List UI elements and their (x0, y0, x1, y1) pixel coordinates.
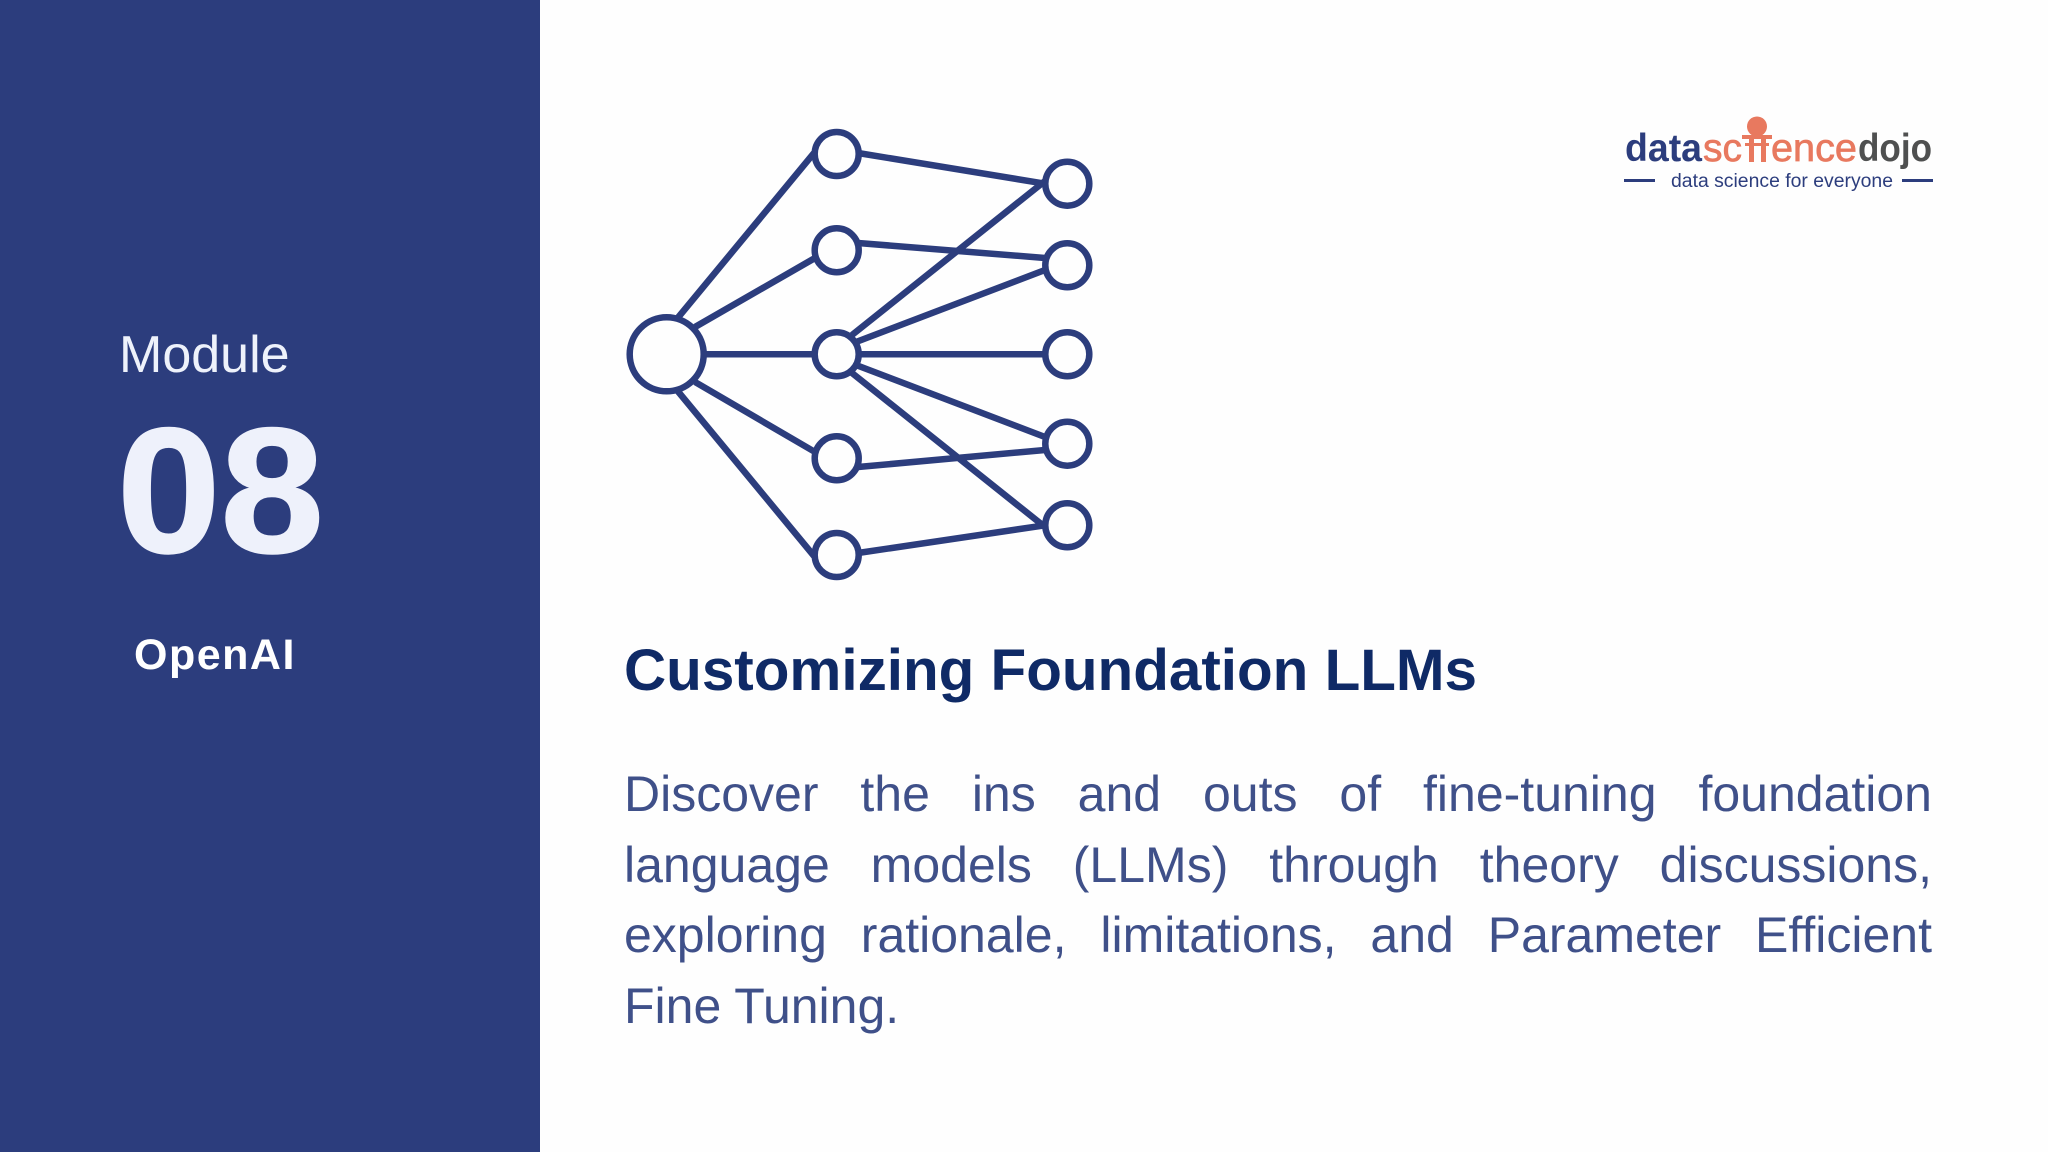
logo: data science dojo (1624, 116, 1933, 192)
panel: module sidebar (0, 0, 540, 1152)
body text: Discover the ins and outs of fine-tuning foundation (624, 766, 1932, 822)
module number: 08 (117, 391, 324, 590)
body text: Fine Tuning. (624, 978, 899, 1034)
title: Customizing Foundation LLMs (624, 638, 1477, 703)
logo: data science dojo: dojo (1858, 127, 1932, 170)
body text: language models (LLMs) through theory discussions, (624, 836, 1932, 892)
logo: data science dojo: data science for everyone (1671, 171, 1893, 192)
logo: data science dojo: sc (1703, 127, 1742, 170)
label: Module: Module (119, 326, 290, 384)
logo: data science dojo: data (1625, 127, 1702, 170)
body text: exploring rationale, limitations, and Parameter Efficient (624, 907, 1932, 963)
body text (624, 766, 1932, 1034)
label: OpenAI: OpenAI (134, 631, 296, 679)
icon: neural network tree (626, 128, 1093, 580)
logo: data science dojo: ence (1771, 127, 1857, 170)
